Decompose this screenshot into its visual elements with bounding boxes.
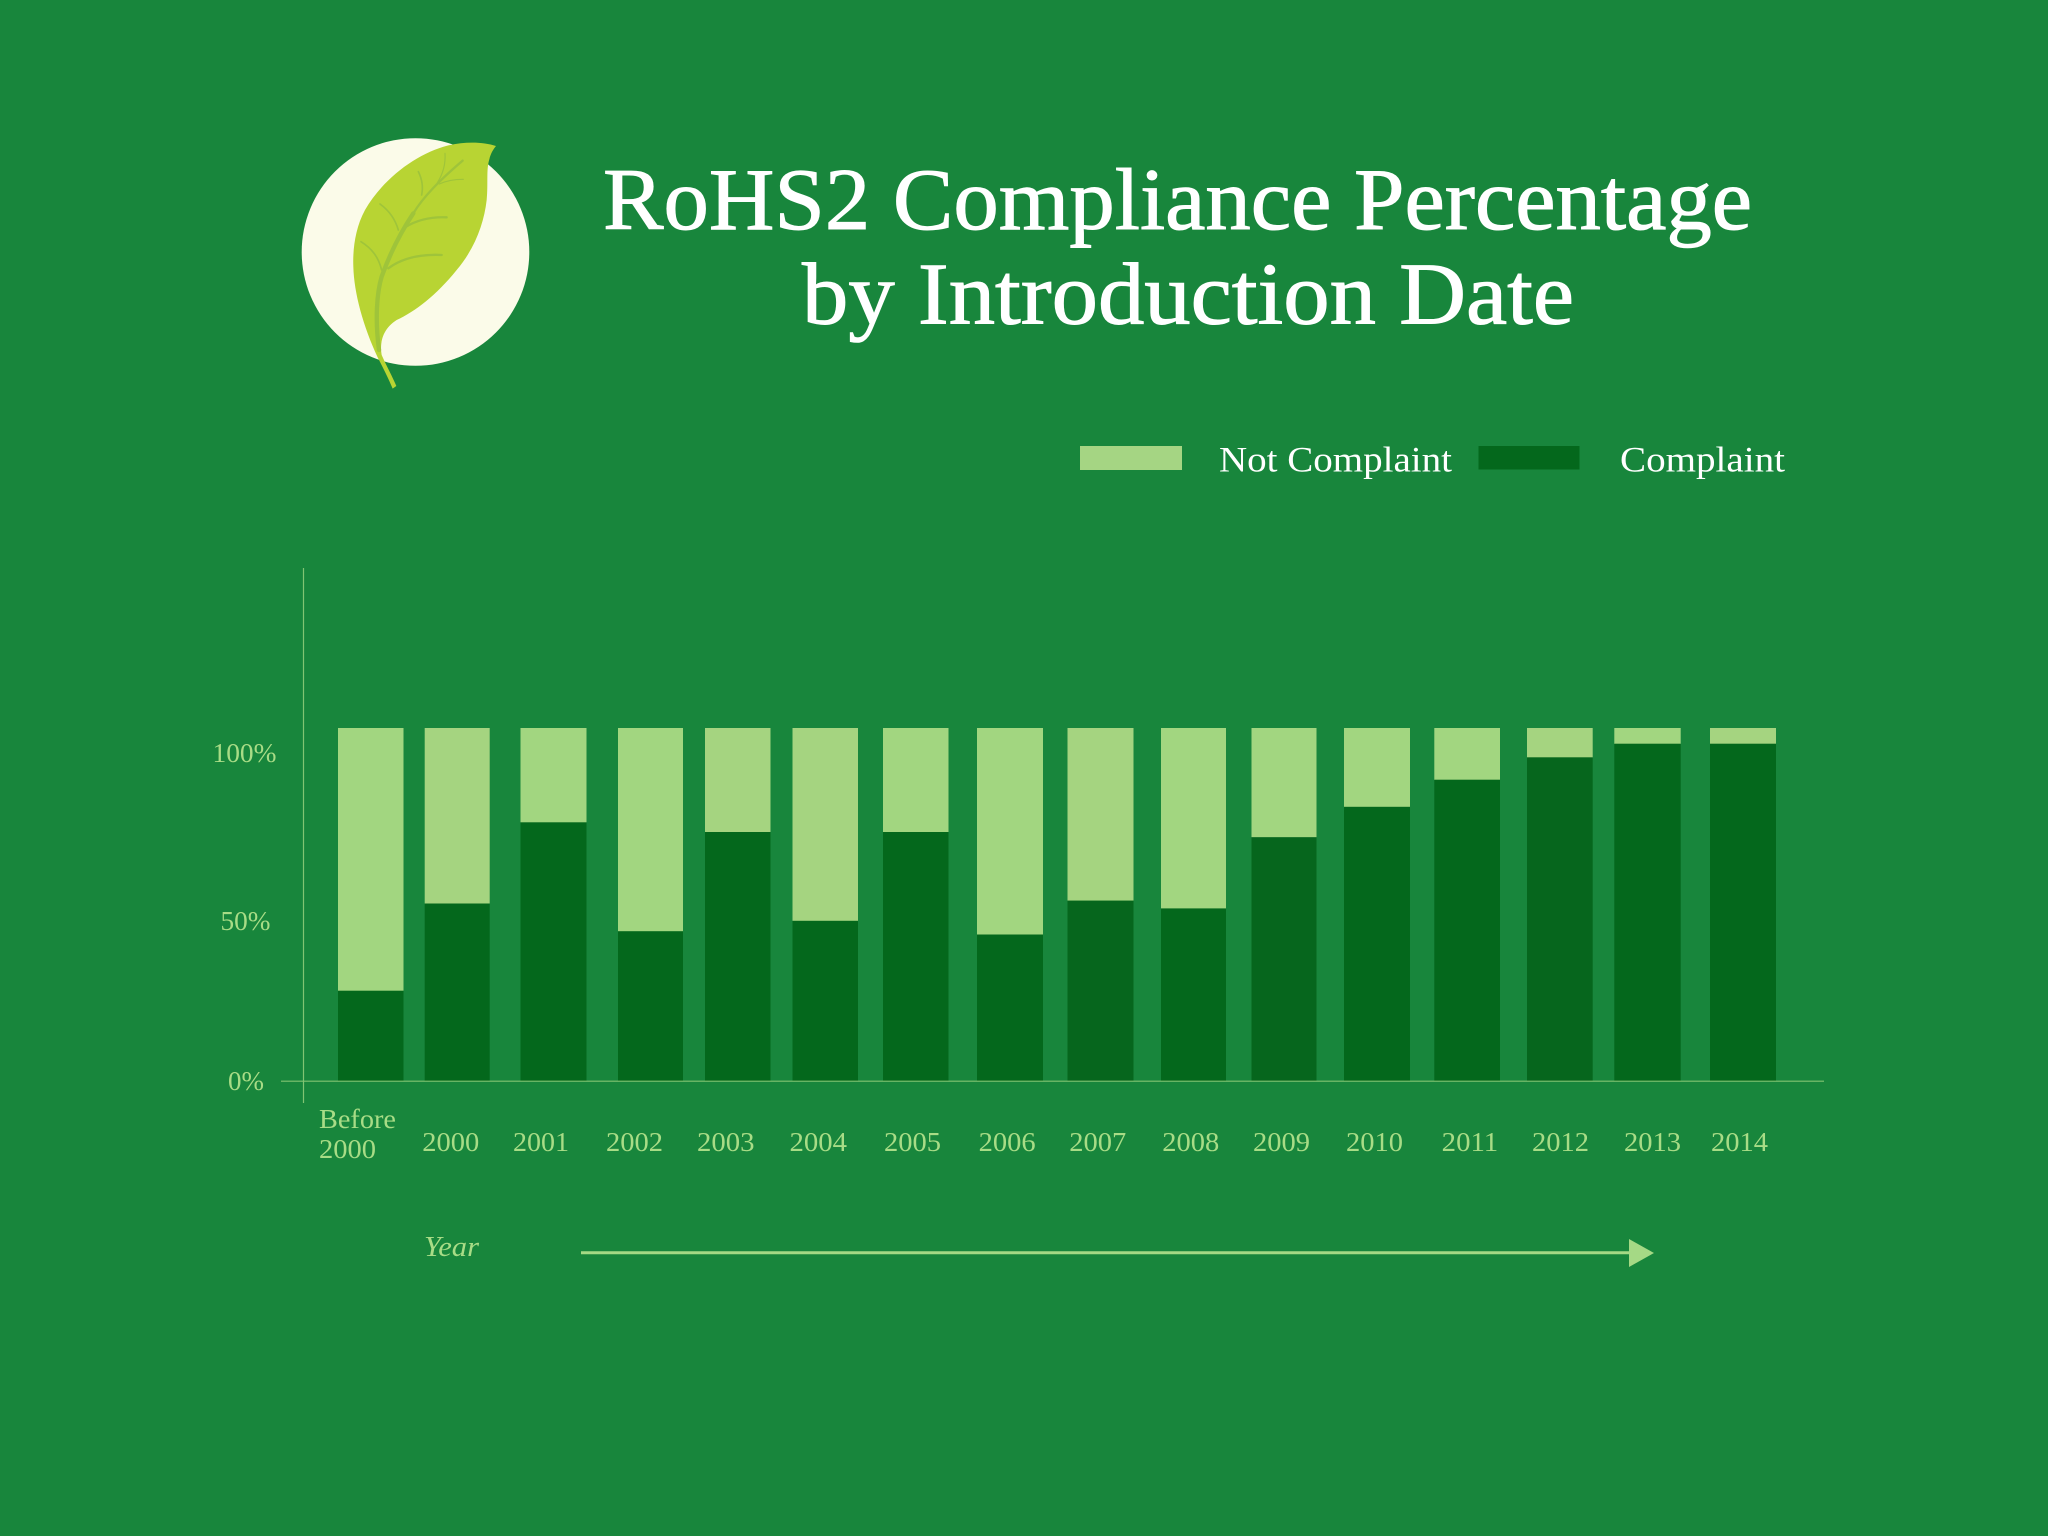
x axis labels: 2003 (697, 1127, 754, 1157)
legend: complaint (1478, 440, 1785, 480)
logo circle (302, 138, 529, 366)
stacked bar chart (212, 568, 1824, 1164)
x axis labels: 2013 (1624, 1127, 1681, 1157)
x axis labels: 2005 (884, 1127, 941, 1157)
x axis labels: 2004 (790, 1127, 848, 1157)
bar: 2013 (1614, 728, 1681, 1081)
bar: 2009 (1252, 728, 1316, 1081)
bar: 2005 (883, 728, 948, 1081)
axis title: year: Year (424, 1232, 479, 1263)
title (603, 152, 1752, 344)
bar: 2003 (705, 728, 770, 1081)
y axis labels (212, 738, 276, 1096)
x axis labels: 2001 (513, 1127, 569, 1157)
x axis labels: 2000 (319, 1134, 376, 1164)
x axis labels: 2000 (422, 1127, 479, 1157)
x axis labels: 2010 (1346, 1127, 1403, 1157)
bar: 2011 (1434, 728, 1500, 1081)
y axis labels: 0% (228, 1066, 264, 1096)
x axis labels: 2012 (1532, 1127, 1589, 1157)
legend: complaint: Complaint (1620, 440, 1785, 480)
bar: 2001 (520, 728, 586, 1081)
bar: 2014 (1710, 728, 1776, 1081)
bar: 2010 (1344, 728, 1410, 1081)
bar: 2008 (1161, 728, 1226, 1081)
bar: 2007 (1068, 728, 1134, 1081)
y axis labels: 100% (212, 738, 276, 768)
x axis labels: 2008 (1162, 1127, 1219, 1157)
title: RoHS2 Compliance Percentage (603, 152, 1752, 249)
legend: not complaint: Not Complaint (1219, 440, 1452, 480)
x axis labels: 2009 (1253, 1127, 1310, 1157)
bar: 2002 (618, 728, 683, 1081)
legend (1080, 440, 1785, 480)
arrow (581, 1239, 1654, 1267)
axes (281, 568, 1824, 1103)
x axis labels: 2014 (1711, 1127, 1769, 1157)
x axis labels: 2007 (1069, 1127, 1126, 1157)
title: by Introduction Date (802, 246, 1574, 344)
bar: before 2000 (338, 728, 404, 1081)
leaf (353, 143, 496, 389)
bar: 2004 (792, 728, 858, 1081)
icon: leaf logo (302, 138, 529, 389)
bar: 2006 (977, 728, 1043, 1081)
x axis labels: 2011 (1442, 1127, 1498, 1157)
y axis labels: 50% (220, 906, 270, 936)
x axis labels: 2002 (606, 1127, 663, 1157)
x axis labels (319, 1104, 1769, 1164)
legend: not complaint (1080, 440, 1452, 480)
x axis labels: Before (319, 1104, 396, 1134)
x axis labels: 2006 (979, 1127, 1036, 1157)
bar: 2000 (425, 728, 490, 1081)
bar: 2012 (1527, 728, 1593, 1081)
